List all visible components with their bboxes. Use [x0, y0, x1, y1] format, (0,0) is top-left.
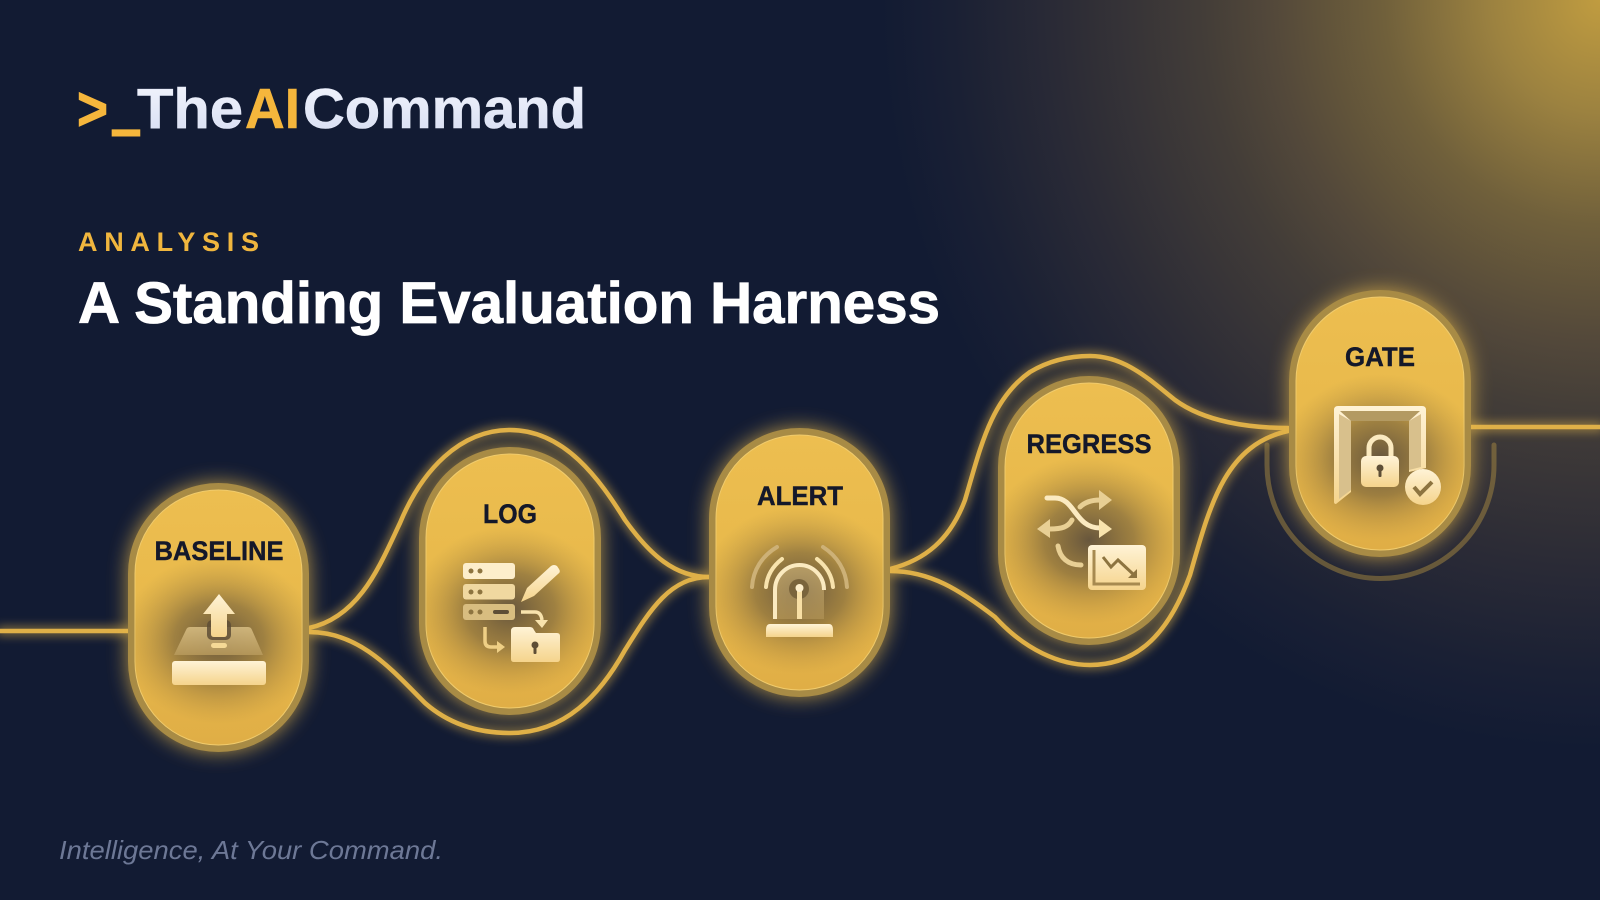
label: regress: REGRESS	[1026, 429, 1152, 459]
logo: >	[77, 75, 108, 144]
logo	[77, 75, 586, 144]
logo: _	[113, 76, 139, 140]
icon: upload tray	[172, 594, 266, 685]
icon: gate with lock and check	[1334, 406, 1441, 505]
node: regress	[989, 376, 1189, 645]
title: A Standing Evaluation Harness	[78, 271, 940, 336]
label: baseline: BASELINE	[154, 536, 284, 566]
tagline: Intelligence, At Your Command.	[59, 835, 443, 865]
connector lines	[0, 356, 1600, 733]
logo: The	[137, 77, 243, 141]
logo: AI	[245, 77, 300, 141]
icon: server, pencil and folder	[463, 563, 560, 662]
node: gate	[1280, 290, 1480, 557]
logo: Command	[303, 77, 586, 141]
label: log: LOG	[483, 499, 537, 529]
icon: shuffle and declining chart	[1037, 490, 1146, 590]
label: alert: ALERT	[757, 481, 843, 511]
eyebrow: analysis: ANALYSIS	[78, 227, 259, 257]
node: alert	[700, 428, 900, 697]
node: log	[410, 447, 610, 715]
node: baseline	[119, 483, 319, 752]
icon: siren	[752, 547, 847, 637]
label: gate: GATE	[1345, 342, 1415, 372]
